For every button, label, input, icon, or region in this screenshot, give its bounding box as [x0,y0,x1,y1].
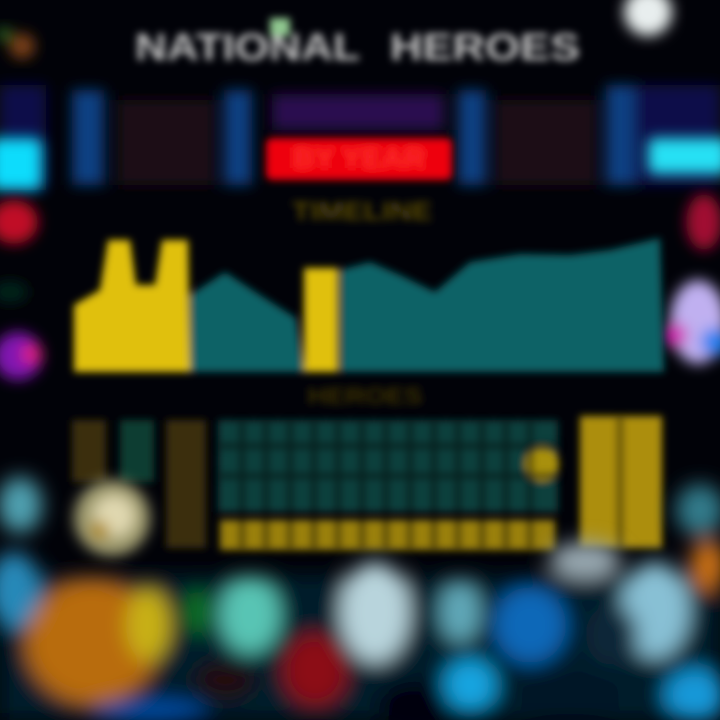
chart heading 1: TIMELINE [292,196,432,226]
bar: yellow block left [74,240,190,372]
right side decorations [663,194,720,364]
bottom illustration: crowd of characters [0,477,720,720]
red banner: BY YEAR [293,142,425,175]
icon: top left logo [0,28,35,59]
left side decorations [0,200,42,380]
icon: portrait circle [74,480,150,556]
header band [0,85,720,190]
matrix: gold columns [580,416,662,548]
area: teal series [190,238,664,372]
matrix: dark olive columns [72,420,106,482]
matrix: gold row [220,520,555,550]
matrix: teal columns [120,420,154,482]
red banner [266,138,452,180]
area chart [74,238,664,372]
title [135,18,580,69]
dot matrix chart [72,416,662,550]
cyan side bars [0,138,720,190]
chart heading 2: HEROES [308,383,422,410]
bar: yellow block centre [304,268,338,372]
title: NATIONAL [135,27,360,69]
title: HEROES [390,27,580,69]
matrix grid lines [218,416,620,550]
matrix: gold dot [525,447,559,481]
icon: top right moon [624,0,672,36]
